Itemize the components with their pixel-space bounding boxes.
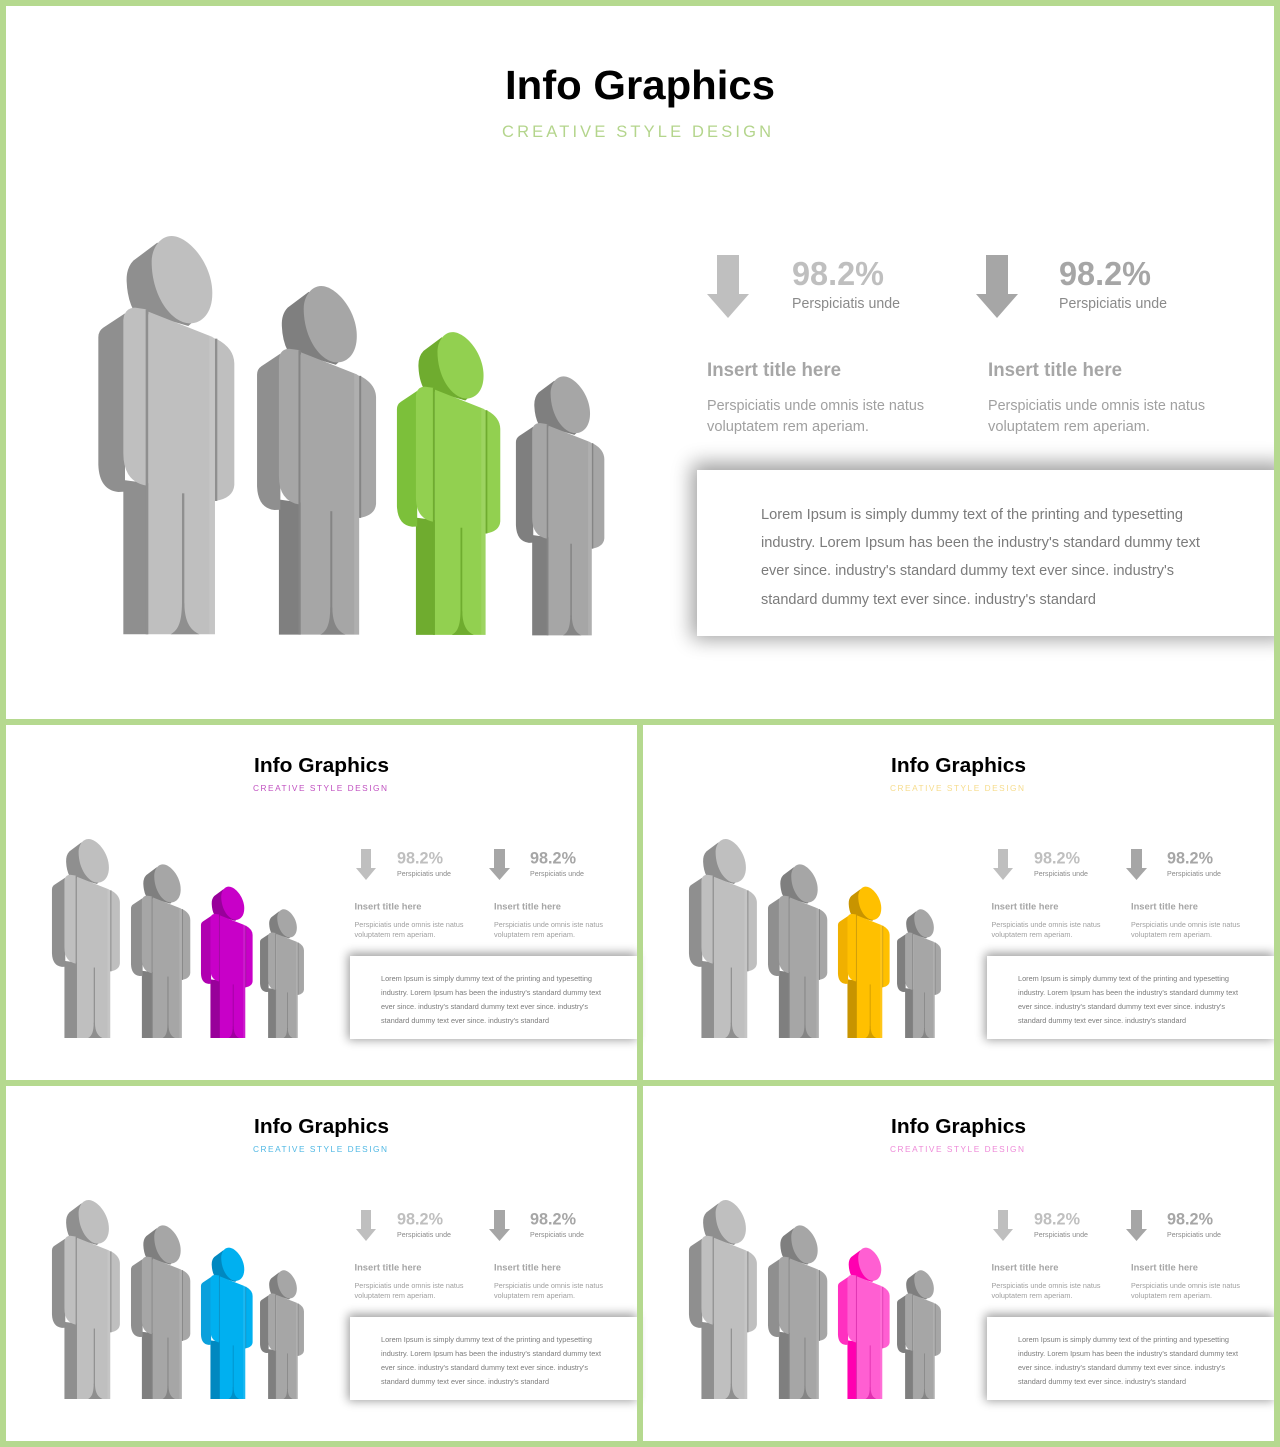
subtitle: CREATIVE STYLE DESIGN <box>253 783 387 793</box>
title: Info Graphics <box>254 754 389 777</box>
stat: right caption: Perspiciatis unde <box>1167 1230 1221 1239</box>
title: Info Graphics <box>254 1115 389 1138</box>
callout: lorem ipsum box: industry. Lorem Ipsum has been the industry's standard dummy text <box>381 988 601 997</box>
text block: right column: voluptatem rem aperiam. <box>1131 1291 1212 1300</box>
people figures <box>52 839 304 1038</box>
callout: lorem ipsum box <box>348 1314 637 1401</box>
callout: lorem ipsum box: Lorem Ipsum is simply dummy text of the printing and typesetting <box>1018 974 1229 983</box>
stat: left caption: Perspiciatis unde <box>397 869 451 878</box>
panel: yellow slide <box>689 754 1274 1040</box>
subtitle: CREATIVE STYLE DESIGN <box>253 1144 387 1154</box>
heading: right column: Insert title here <box>988 360 1122 381</box>
callout: lorem ipsum box: industry. Lorem Ipsum has been the industry's standard dummy text <box>1018 988 1238 997</box>
figure: smallest grey person <box>897 909 941 1038</box>
stat: left caption: Perspiciatis unde <box>397 1230 451 1239</box>
title: Info Graphics <box>891 1115 1026 1138</box>
text block: left column: voluptatem rem aperiam. <box>992 1291 1072 1300</box>
stat: left percentage: 98.2% <box>1034 1210 1080 1228</box>
heading: right column: Insert title here <box>494 902 561 912</box>
figure: second grey person <box>257 286 376 635</box>
stat: right percentage: 98.2% <box>1167 850 1213 868</box>
stat: right caption: Perspiciatis unde <box>1059 295 1167 312</box>
figure: second grey person <box>768 864 827 1038</box>
panel: blue slide <box>52 1115 637 1401</box>
callout: lorem ipsum box: standard dummy text ever since. industry's standard <box>381 1016 549 1025</box>
subtitle: CREATIVE STYLE DESIGN <box>502 123 771 141</box>
stat: right caption: Perspiciatis unde <box>1167 869 1221 878</box>
text block: left column: Perspiciatis unde omnis iste natus <box>354 1281 464 1290</box>
text block: left column: voluptatem rem aperiam. <box>354 1291 436 1300</box>
callout: lorem ipsum box: Lorem Ipsum is simply dummy text of the printing and typesetting <box>381 1335 592 1344</box>
panel: main green slide <box>98 62 1280 639</box>
stat: left caption: Perspiciatis unde <box>1034 869 1088 878</box>
text block: right column: voluptatem rem aperiam. <box>988 418 1150 435</box>
text block: right column: voluptatem rem aperiam. <box>494 930 575 939</box>
text block: right column <box>494 1281 603 1300</box>
text block: right column: Perspiciatis unde omnis iste natus <box>1131 1281 1240 1290</box>
stat: left percentage: 98.2% <box>397 1210 443 1228</box>
stat: left caption: Perspiciatis unde <box>1034 1230 1088 1239</box>
text block: left column: voluptatem rem aperiam. <box>992 930 1072 939</box>
figure: second grey person <box>131 1225 190 1399</box>
heading: left column: Insert title here <box>354 1262 422 1274</box>
text block: left column <box>354 1281 464 1300</box>
people figures <box>689 1200 941 1399</box>
text block: right column <box>1131 1281 1240 1300</box>
callout: lorem ipsum box <box>985 1314 1274 1401</box>
stat: left percentage: 98.2% <box>397 850 443 868</box>
figure: green highlighted person <box>397 332 500 635</box>
stat: right percentage: 98.2% <box>530 1210 576 1228</box>
callout: lorem ipsum box: ever since. industry's standard dummy text ever since. industry's <box>381 1363 588 1372</box>
figure: tallest grey person <box>689 839 757 1038</box>
subtitle: CREATIVE STYLE DESIGN <box>890 783 1024 793</box>
stat: right caption: Perspiciatis unde <box>530 869 584 878</box>
figure: tallest grey person <box>689 1200 757 1399</box>
text block: left column: Perspiciatis unde omnis iste natus <box>992 920 1101 929</box>
icon: down arrow right <box>1126 1210 1147 1241</box>
callout: lorem ipsum box <box>985 953 1274 1040</box>
panel: purple slide <box>52 754 637 1040</box>
text block: left column: voluptatem rem aperiam. <box>354 930 436 939</box>
text block: right column: voluptatem rem aperiam. <box>494 1291 575 1300</box>
icon: down arrow left <box>993 849 1013 880</box>
figure: tallest grey person <box>52 839 120 1038</box>
people figures <box>689 839 941 1038</box>
callout: lorem ipsum box: Lorem Ipsum is simply dummy text of the printing and typesetting <box>761 507 1183 523</box>
title: Info Graphics <box>891 754 1026 777</box>
heading: right column: Insert title here <box>1131 1262 1198 1274</box>
figure: purple highlighted person <box>201 887 253 1038</box>
text block: right column <box>1131 920 1240 939</box>
figure: smallest grey person <box>260 1270 304 1399</box>
text block: right column <box>494 920 603 939</box>
callout: lorem ipsum box: industry. Lorem Ipsum has been the industry's standard dummy text <box>381 1349 601 1358</box>
figure: smallest grey person <box>897 1270 941 1399</box>
heading: left column: Insert title here <box>707 360 841 381</box>
text block: left column: Perspiciatis unde omnis iste natus <box>354 920 464 929</box>
text block: right column <box>988 397 1205 435</box>
heading: left column: Insert title here <box>354 902 422 912</box>
heading: right column: Insert title here <box>1131 902 1198 912</box>
text block: left column: voluptatem rem aperiam. <box>707 418 869 435</box>
text block: right column: Perspiciatis unde omnis iste natus <box>1131 920 1240 929</box>
heading: left column: Insert title here <box>992 1262 1058 1274</box>
figure: second grey person <box>131 864 190 1038</box>
stat: left caption: Perspiciatis unde <box>792 295 900 312</box>
callout: lorem ipsum box: standard dummy text ever since. industry's standard <box>1018 1377 1186 1386</box>
callout: lorem ipsum box: industry. Lorem Ipsum has been the industry's standard dummy text <box>761 535 1200 551</box>
callout: lorem ipsum box: ever since. industry's standard dummy text ever since. industry's <box>761 563 1174 579</box>
callout: lorem ipsum box: Lorem Ipsum is simply dummy text of the printing and typesetting <box>1018 1335 1229 1344</box>
text block: left column: Perspiciatis unde omnis iste natus <box>707 397 924 414</box>
text block: left column: Perspiciatis unde omnis iste natus <box>992 1281 1101 1290</box>
figure: tallest grey person <box>52 1200 120 1399</box>
text block: left column <box>992 920 1101 939</box>
stat: right percentage: 98.2% <box>1059 255 1151 292</box>
heading: right column: Insert title here <box>494 1262 561 1274</box>
text block: left column <box>707 397 924 435</box>
heading: left column: Insert title here <box>992 902 1058 912</box>
stat: right percentage: 98.2% <box>1167 1210 1213 1228</box>
callout: lorem ipsum box <box>692 463 1280 639</box>
stat: right percentage: 98.2% <box>530 850 576 868</box>
text block: right column: voluptatem rem aperiam. <box>1131 930 1212 939</box>
people figures <box>98 236 604 635</box>
callout: lorem ipsum box: ever since. industry's standard dummy text ever since. industry's <box>381 1002 588 1011</box>
callout: lorem ipsum box: standard dummy text ever since. industry's standard <box>381 1377 549 1386</box>
title: Info Graphics <box>505 62 775 108</box>
figure: tallest grey person <box>98 236 234 634</box>
icon: down arrow right <box>489 1210 510 1241</box>
figure: yellow highlighted person <box>838 887 890 1038</box>
callout: lorem ipsum box: ever since. industry's standard dummy text ever since. industry's <box>1018 1002 1225 1011</box>
stat: left percentage: 98.2% <box>1034 850 1080 868</box>
text block: left column <box>354 920 464 939</box>
callout: lorem ipsum box: standard dummy text ever since. industry's standard <box>1018 1016 1186 1025</box>
subtitle: CREATIVE STYLE DESIGN <box>890 1144 1024 1154</box>
callout: lorem ipsum box <box>348 953 637 1040</box>
people figures <box>52 1200 304 1399</box>
text block: left column <box>992 1281 1101 1300</box>
stat: left percentage: 98.2% <box>792 255 884 292</box>
icon: down arrow left <box>993 1210 1013 1241</box>
figure: smallest grey person <box>260 909 304 1038</box>
callout: lorem ipsum box: ever since. industry's standard dummy text ever since. industry's <box>1018 1363 1225 1372</box>
icon: down arrow left <box>356 849 376 880</box>
figure: blue highlighted person <box>201 1248 253 1399</box>
icon: down arrow right <box>976 255 1018 318</box>
callout: lorem ipsum box: industry. Lorem Ipsum has been the industry's standard dummy text <box>1018 1349 1238 1358</box>
text block: right column: Perspiciatis unde omnis iste natus <box>988 397 1205 414</box>
text block: right column: Perspiciatis unde omnis iste natus <box>494 1281 603 1290</box>
icon: down arrow left <box>356 1210 376 1241</box>
icon: down arrow right <box>1126 849 1147 880</box>
callout: lorem ipsum box: standard dummy text ever since. industry's standard <box>761 592 1096 608</box>
panel: pink slide <box>689 1115 1274 1401</box>
icon: down arrow right <box>489 849 510 880</box>
text block: right column: Perspiciatis unde omnis iste natus <box>494 920 603 929</box>
stat: right caption: Perspiciatis unde <box>530 1230 584 1239</box>
figure: smallest grey person <box>516 376 604 635</box>
icon: down arrow left <box>707 255 749 318</box>
figure: pink highlighted person <box>838 1248 890 1399</box>
figure: second grey person <box>768 1225 827 1399</box>
callout: lorem ipsum box: Lorem Ipsum is simply dummy text of the printing and typesetting <box>381 974 592 983</box>
